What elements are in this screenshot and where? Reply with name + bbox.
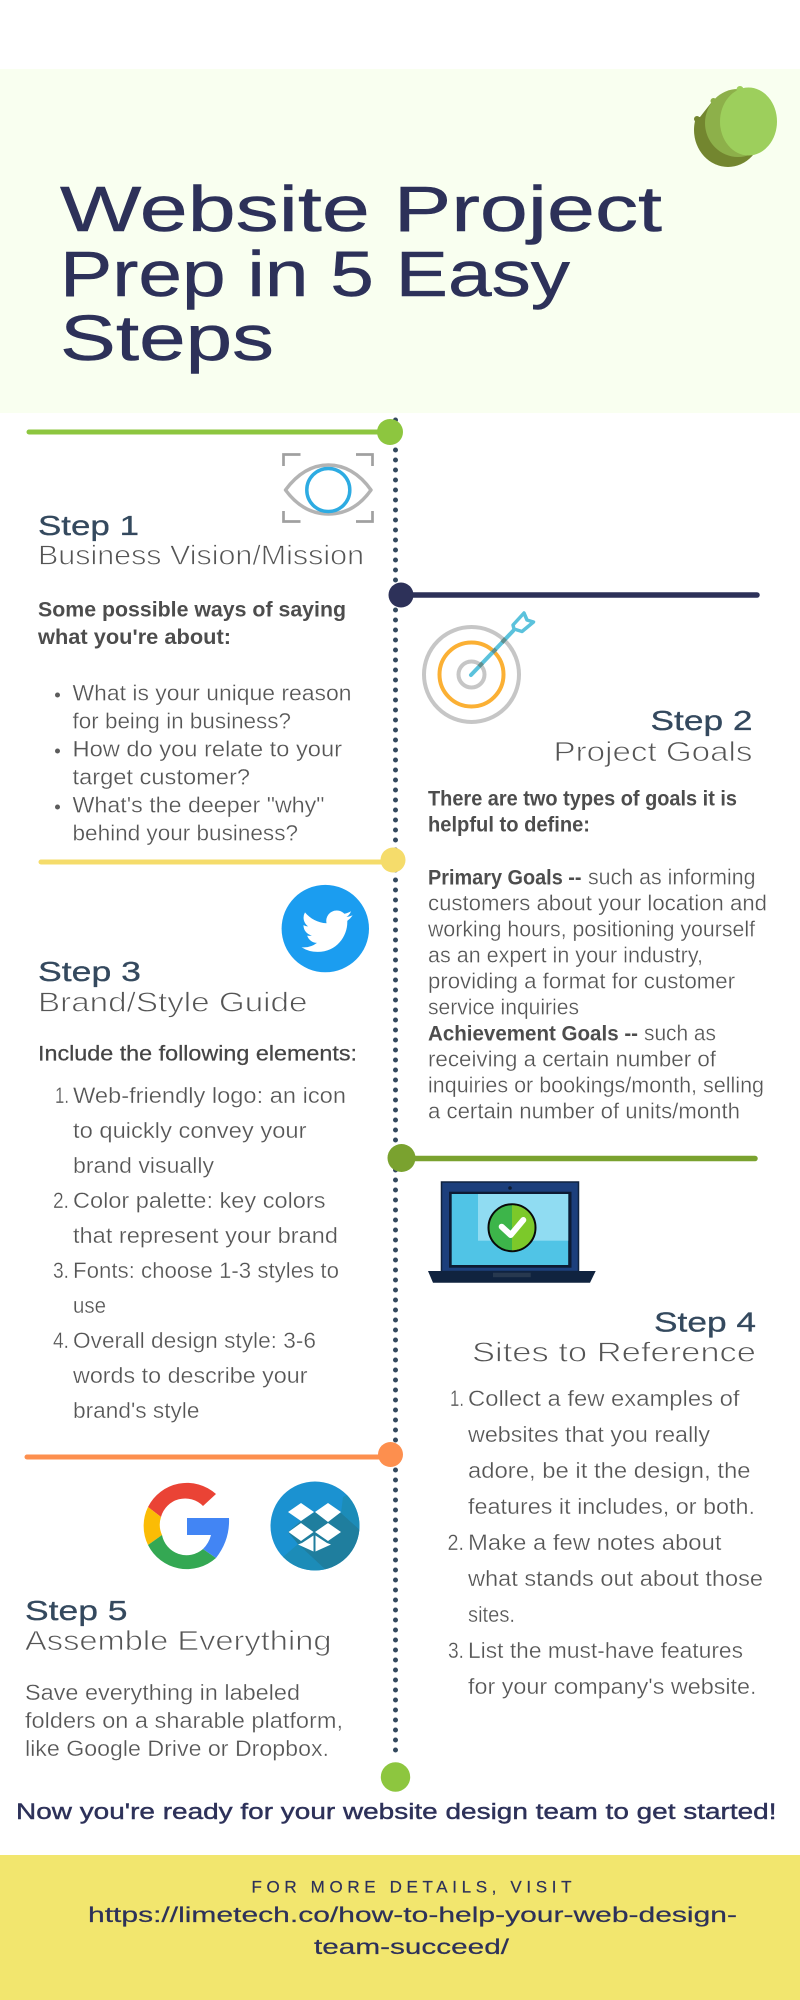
step 4 list: sites. [468, 1602, 515, 1627]
step 1 text: How do you relate to your [72, 736, 342, 762]
icon: dropbox [270, 1482, 366, 1572]
step 1 text: Some possible ways of saying [38, 598, 346, 622]
step 3 connector [41, 848, 406, 872]
step 4 list: Collect a few examples of [468, 1386, 740, 1411]
step 2 text: such as [644, 1020, 716, 1046]
step 4 list: what stands out about those [467, 1566, 763, 1591]
step 1 connector [29, 419, 403, 445]
footer text: team-succeed/ [314, 1936, 509, 1959]
header band [0, 69, 800, 413]
step 5 text: like Google Drive or Dropbox. [25, 1736, 329, 1761]
step 4 heading: Sites to Reference [472, 1336, 756, 1368]
footer band [0, 1855, 800, 2000]
step 3 list: 3. [53, 1258, 69, 1283]
title [60, 173, 662, 374]
step 4 list: features it includes, or both. [468, 1494, 755, 1519]
footer text [88, 1878, 737, 1959]
step 4 list: 3. [448, 1638, 464, 1663]
step 2 text: customers about your location and [428, 890, 767, 916]
icon: lime [688, 80, 777, 167]
step 1 text: behind your business? [72, 820, 298, 846]
step 1 heading [38, 510, 364, 570]
step 4 list: 2. [448, 1530, 464, 1555]
title: Steps [60, 302, 274, 374]
step 2 text: working hours, positioning yourself [427, 916, 756, 942]
step 2 text: There are two types of goals it is [428, 786, 737, 810]
icon: eye [284, 454, 372, 522]
step 1 text: what you're about: [37, 625, 231, 649]
step 3 list: Include the following elements: [38, 1042, 357, 1066]
icon: twitter [282, 885, 369, 972]
step 3 list: Web-friendly logo: an icon [73, 1083, 346, 1108]
step 2 text: Primary Goals -- [428, 866, 582, 890]
step 1 text: What is your unique reason [72, 680, 352, 706]
step 3 list: words to describe your [72, 1363, 308, 1388]
step 4 heading: Step 4 [654, 1306, 756, 1338]
step 4 list: List the must-have features [468, 1638, 743, 1663]
step 3 list: 4. [53, 1328, 69, 1353]
step 3 list: to quickly convey your [73, 1118, 306, 1143]
step 1 heading: Business Vision/Mission [38, 540, 364, 570]
step 4 heading [472, 1306, 756, 1368]
step 2 text: Achievement Goals -- [428, 1022, 638, 1046]
step 2 text: inquiries or bookings/month, selling [428, 1072, 764, 1098]
step 3 list: brand visually [73, 1153, 214, 1178]
step 4 list: Make a few notes about [468, 1530, 722, 1555]
step 3 list: Color palette: key colors [73, 1188, 326, 1213]
step 4 list [448, 1386, 763, 1699]
step 3 list: that represent your brand [73, 1223, 338, 1248]
footer text: FOR MORE DETAILS, VISIT [252, 1878, 572, 1896]
step 1 text: What's the deeper "why" [72, 792, 324, 818]
step 1 text [37, 598, 352, 846]
icon: laptop with check [428, 1182, 596, 1283]
dotted timeline [393, 420, 398, 1760]
step 3 list: Overall design style: 3-6 [73, 1328, 316, 1353]
step 4 list: adore, be it the design, the [468, 1458, 750, 1483]
title: Prep in 5 Easy [60, 238, 570, 310]
step 3 list: brand's style [73, 1398, 200, 1423]
step 2 text: such as informing [588, 864, 756, 890]
step 1 heading: Step 1 [38, 510, 139, 541]
step 5 text: folders on a sharable platform, [25, 1708, 343, 1733]
step 5 text [25, 1680, 343, 1761]
step 4 list: for your company's website. [468, 1674, 756, 1699]
step 2 heading [554, 705, 752, 767]
step 3 list: use [73, 1293, 106, 1318]
step 2 text: receiving a certain number of [428, 1046, 717, 1072]
step 2 text: a certain number of units/month [428, 1098, 740, 1124]
step 5 text: Save everything in labeled [25, 1680, 300, 1705]
step 1 text: target customer? [72, 764, 250, 790]
timeline end dot [381, 1762, 410, 1792]
step 2 heading: Step 2 [650, 705, 752, 736]
step 2 text: service inquiries [428, 994, 579, 1020]
step 3 list [38, 1042, 357, 1423]
step 2 text: as an expert in your industry, [428, 942, 703, 968]
title: Website Project [60, 173, 662, 245]
step 3 list: 2. [53, 1188, 69, 1213]
step 2 text: helpful to define: [428, 812, 590, 836]
step 1 text: for being in business? [72, 708, 291, 734]
step 5 heading: Step 5 [25, 1595, 127, 1626]
step 2 heading: Project Goals [554, 736, 752, 767]
step 2 text: providing a format for customer [428, 968, 735, 994]
step 3 heading: Brand/Style Guide [38, 986, 308, 1018]
step 5 connector [27, 1442, 403, 1467]
step 5 heading [25, 1595, 332, 1656]
step 4 list: 1. [450, 1386, 464, 1411]
step 4 list: websites that you really [467, 1422, 710, 1447]
footer text: https://limetech.co/how-to-help-your-web-design- [88, 1904, 737, 1927]
step 3 list: 1. [55, 1083, 69, 1108]
step 3 heading: Step 3 [38, 956, 141, 987]
step 3 list: Fonts: choose 1-3 styles to [73, 1258, 339, 1283]
icon: google [144, 1483, 229, 1569]
step 3 heading [38, 956, 308, 1018]
step 5 heading: Assemble Everything [25, 1625, 332, 1656]
step 2 text [427, 786, 767, 1124]
step 4 connector [388, 1144, 755, 1172]
step 2 connector [388, 582, 757, 608]
icon: target with arrow [424, 613, 534, 722]
closing line: Now you're ready for your website design team to get started! [16, 1799, 776, 1824]
